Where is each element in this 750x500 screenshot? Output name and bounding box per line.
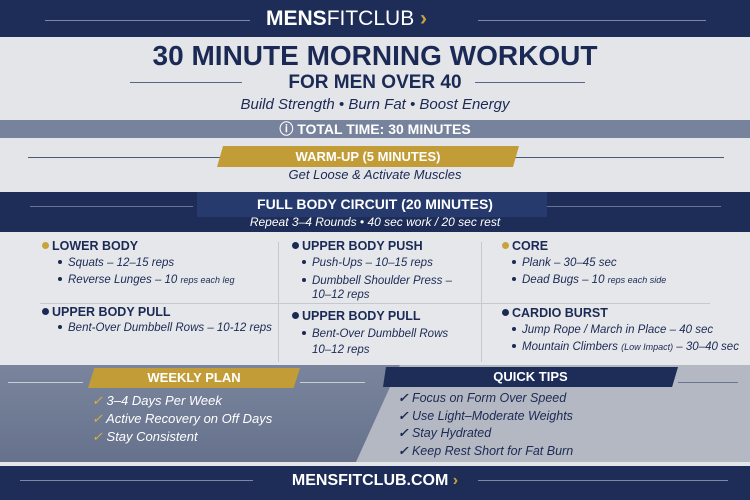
core: Dead Bugs – 10 reps each side [522, 274, 666, 286]
total time band: ⓘ TOTAL TIME: 30 MINUTES [279, 121, 471, 137]
upper body pull 2: Bent-Over Dumbbell Rows [312, 328, 448, 340]
top bar [0, 0, 750, 37]
circuit band [0, 192, 750, 232]
quick tips panel: ✓ Focus on Form Over Speed [398, 391, 566, 405]
warm-up banner: WARM-UP (5 MINUTES) [296, 149, 440, 164]
circuit subtitle: Repeat 3–4 Rounds • 40 sec work / 20 sec rest [250, 215, 500, 229]
core [502, 239, 666, 286]
weekly plan panel: ✓ Stay Consistent [92, 429, 198, 444]
upper body pull 2: 10–12 reps [312, 344, 370, 356]
upper body push: Push-Ups – 10–15 reps [312, 257, 433, 269]
upper body pull 2 [292, 309, 448, 356]
total time band [0, 120, 750, 138]
lower body: LOWER BODY [52, 239, 138, 253]
warm-up subtitle: Get Loose & Activate Muscles [289, 167, 461, 182]
upper body pull 1: UPPER BODY PULL [52, 305, 171, 319]
footer [0, 466, 750, 500]
cardio burst: CARDIO BURST [512, 306, 608, 320]
upper body push: UPPER BODY PUSH [302, 239, 423, 253]
quick tips panel: ✓ Use Light–Moderate Weights [398, 408, 573, 422]
lower body: Squats – 12–15 reps [68, 257, 174, 269]
weekly plan panel: ✓ 3–4 Days Per Week [92, 393, 222, 408]
weekly plan panel [88, 368, 300, 444]
upper body pull 2: UPPER BODY PULL [302, 309, 421, 323]
footer url: MENSFITCLUB.COM › [292, 472, 458, 489]
upper body pull 1 [42, 305, 272, 334]
exercise grid [0, 232, 750, 365]
core: CORE [512, 239, 548, 253]
cardio burst: Jump Rope / March in Place – 40 sec [522, 324, 713, 336]
upper body push: 10–12 reps [312, 289, 370, 301]
upper body push [292, 239, 452, 301]
circuit heading: FULL BODY CIRCUIT (20 MINUTES) [257, 196, 493, 212]
tagline: Build Strength • Burn Fat • Boost Energy [240, 96, 509, 113]
quick tips panel: ✓ Keep Rest Short for Fat Burn [398, 444, 573, 458]
core: Plank – 30–45 sec [522, 257, 617, 269]
subtitle: FOR MEN OVER 40 [288, 72, 462, 93]
logo: MENSFITCLUB › [266, 7, 427, 30]
lower body: Reverse Lunges – 10 reps each leg [68, 274, 235, 286]
weekly plan panel: WEEKLY PLAN [147, 370, 241, 385]
cardio burst [502, 306, 739, 353]
quick tips panel: QUICK TIPS [493, 369, 568, 384]
bottom section [0, 365, 750, 462]
weekly plan panel: ✓ Active Recovery on Off Days [92, 411, 272, 426]
quick tips panel: ✓ Stay Hydrated [398, 426, 491, 440]
quick tips panel [383, 367, 678, 458]
upper body pull 1: Bent-Over Dumbbell Rows – 10-12 reps [68, 322, 272, 334]
cardio burst: Mountain Climbers (Low Impact) – 30–40 sec [522, 341, 739, 353]
title: 30 MINUTE MORNING WORKOUT [153, 40, 597, 71]
upper body push: Dumbbell Shoulder Press – [312, 275, 452, 287]
lower body [42, 239, 235, 286]
